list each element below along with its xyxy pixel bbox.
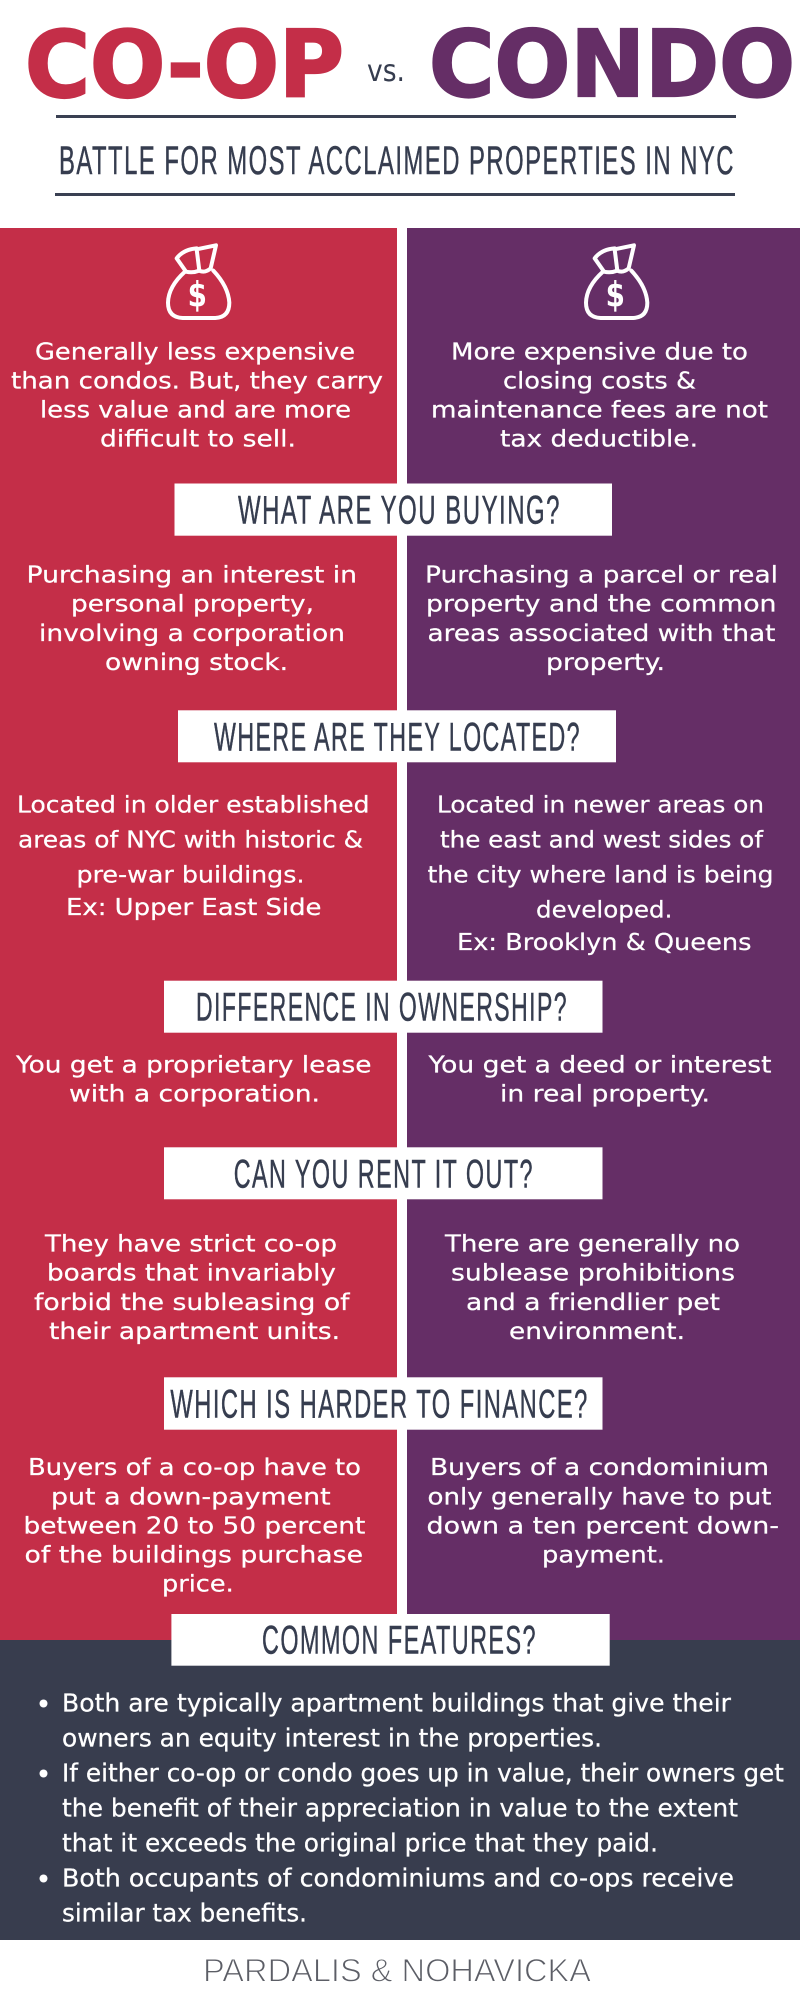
text: condo location: developed. xyxy=(536,895,672,923)
list: common features: Both occupants of condominiums and co-ops receive xyxy=(62,1864,734,1893)
text: co-op cost xyxy=(11,337,383,453)
heading: common features xyxy=(171,1614,610,1666)
text: co-op location: Located in older established xyxy=(17,791,370,819)
text: co-op renting: boards that invariably xyxy=(47,1259,336,1287)
heading: what are you buying: WHAT ARE YOU BUYING? xyxy=(238,489,561,533)
heading: which is harder to finance xyxy=(164,1377,602,1430)
text: co-op renting: They have strict co-op xyxy=(44,1230,337,1258)
text: condo cost: More expensive due to xyxy=(451,337,748,365)
text: co-op buying: owning stock. xyxy=(105,648,288,676)
heading: can you rent it out xyxy=(164,1147,602,1199)
text: co-op cost: Generally less expensive xyxy=(35,337,355,365)
text: condo renting: environment. xyxy=(509,1317,685,1345)
title: vs.: vs. xyxy=(367,54,405,89)
text: co-op buying xyxy=(26,561,357,676)
text: co-op cost: less value and are more xyxy=(40,396,351,424)
text: condo financing: only generally have to put xyxy=(428,1482,772,1510)
text: co-op financing: of the buildings purchase xyxy=(24,1540,363,1568)
text: co-op financing: between 20 to 50 percent xyxy=(24,1511,365,1539)
text: condo buying: property. xyxy=(546,648,665,676)
text: condo ownership xyxy=(427,1051,772,1108)
text: condo ownership: in real property. xyxy=(500,1080,710,1108)
icon: money bag condo: $ xyxy=(606,276,625,316)
text: co-op cost: than condos. But, they carry xyxy=(11,366,383,394)
text: co-op financing: Buyers of a co-op have to xyxy=(28,1453,361,1481)
list: common features: similar tax benefits. xyxy=(62,1899,307,1928)
list: common features: owners an equity interest in the properties. xyxy=(62,1724,602,1753)
text: co-op location: Ex: Upper East Side xyxy=(66,893,322,921)
text: co-op ownership: You get a proprietary lease xyxy=(15,1051,372,1079)
text: co-op buying: involving a corporation xyxy=(39,619,345,647)
text: condo financing: payment. xyxy=(542,1540,665,1568)
heading: what are you buying xyxy=(174,484,612,536)
text: condo location xyxy=(428,791,774,956)
list: common features: the benefit of their appreciation in value to the extent xyxy=(62,1794,738,1823)
text: condo renting xyxy=(444,1230,740,1345)
panel: co-op column xyxy=(0,228,397,1640)
list: common features: that it exceeds the original price that they paid. xyxy=(62,1829,658,1858)
text: co-op renting: forbid the subleasing of xyxy=(34,1288,350,1316)
list: common features: If either co-op or condo goes up in value, their owners get xyxy=(62,1759,784,1788)
heading: can you rent it out: CAN YOU RENT IT OUT? xyxy=(234,1152,534,1196)
icon: money bag co-op xyxy=(168,245,229,318)
text: condo cost: maintenance fees are not xyxy=(431,396,768,424)
list: common features: Both are typically apartment buildings that give their xyxy=(62,1689,732,1718)
heading: difference in ownership xyxy=(164,981,602,1033)
text: co-op financing: put a down-payment xyxy=(51,1482,331,1510)
icon: money bag co-op: $ xyxy=(188,276,207,316)
text: co-op location: areas of NYC with historic & xyxy=(18,826,363,854)
text: condo financing xyxy=(426,1453,779,1568)
text: co-op buying: Purchasing an interest in xyxy=(26,561,357,589)
text: condo buying: areas associated with that xyxy=(428,619,776,647)
text: condo renting: sublease prohibitions xyxy=(451,1259,735,1287)
text: condo buying: Purchasing a parcel or real xyxy=(425,561,778,589)
text: condo location: the city where land is being xyxy=(428,861,774,889)
text: condo buying xyxy=(425,561,778,676)
heading: where are they located xyxy=(178,710,616,762)
text: co-op location: pre-war buildings. xyxy=(76,861,304,889)
icon: money bag condo xyxy=(586,245,647,318)
text: condo location: the east and west sides of xyxy=(440,826,764,854)
text: condo cost: closing costs & xyxy=(503,366,696,394)
text: co-op financing: price. xyxy=(162,1570,234,1598)
title: condo: CONDO xyxy=(429,11,795,118)
heading: common features: COMMON FEATURES? xyxy=(262,1618,537,1662)
text: co-op renting xyxy=(34,1230,350,1345)
header xyxy=(25,11,795,196)
rule bottom xyxy=(55,193,735,196)
panel: common features background xyxy=(0,1640,800,1940)
list: common features xyxy=(40,1689,784,1928)
text: condo buying: property and the common xyxy=(426,590,776,618)
text: co-op location xyxy=(17,791,370,921)
panel: condo column xyxy=(407,228,800,1640)
text: co-op ownership: with a corporation. xyxy=(69,1080,320,1108)
text: co-op ownership xyxy=(15,1051,372,1108)
text: condo renting: and a friendlier pet xyxy=(466,1288,720,1316)
footer: firm name: PARDALIS & NOHAVICKA xyxy=(203,1953,592,1989)
text: condo renting: There are generally no xyxy=(444,1230,740,1258)
text: condo cost: tax deductible. xyxy=(500,425,698,453)
text: co-op buying: personal property, xyxy=(71,590,314,618)
text: condo cost xyxy=(431,337,768,453)
title: co-op: CO-OP xyxy=(25,12,344,118)
text: condo financing: Buyers of a condominium xyxy=(430,1453,769,1481)
text: condo location: Ex: Brooklyn & Queens xyxy=(457,928,752,956)
text: co-op cost: difficult to sell. xyxy=(100,425,296,453)
text: condo financing: down a ten percent down- xyxy=(426,1511,779,1539)
rule top xyxy=(56,115,736,118)
text: condo location: Located in newer areas on xyxy=(437,791,764,819)
text: condo ownership: You get a deed or interest xyxy=(427,1051,772,1079)
text: co-op renting: their apartment units. xyxy=(49,1317,340,1345)
text: co-op financing xyxy=(24,1453,365,1598)
